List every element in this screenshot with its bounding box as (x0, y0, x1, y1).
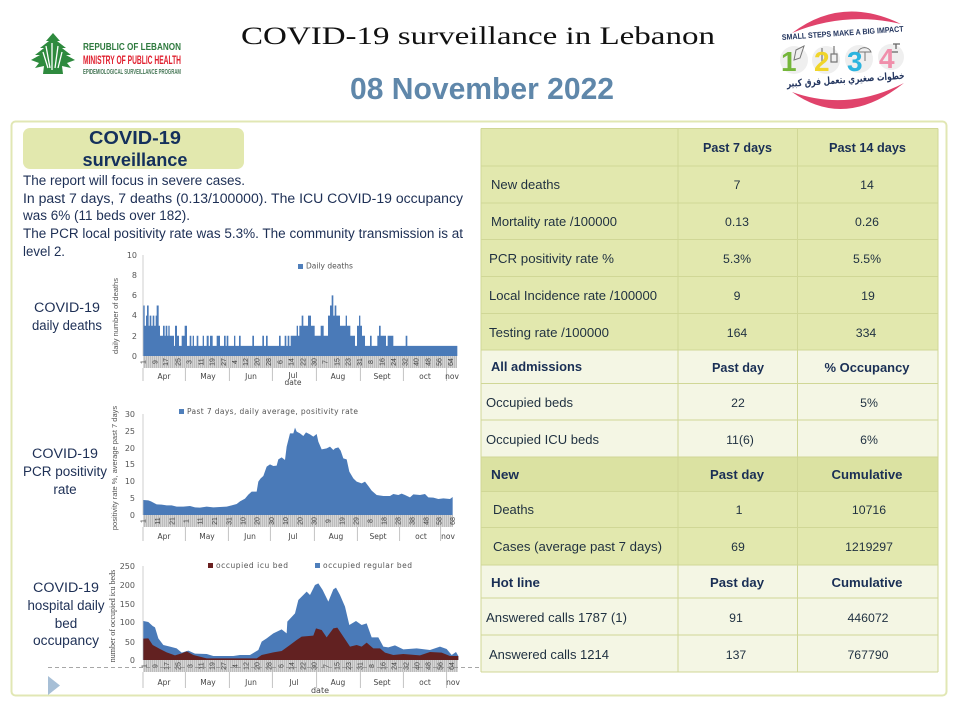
date axis: 58 (437, 517, 444, 525)
badge: small steps make a big impact: SMALL STEPS MAKE A BIG IMPACT (782, 24, 904, 42)
date axis: 48 (425, 358, 432, 366)
row: answered calls 1214: 137 (726, 648, 746, 662)
date axis: 20 (255, 517, 262, 525)
date axis (142, 660, 460, 695)
row: hot line: Past day (710, 575, 765, 590)
date axis: date (285, 378, 302, 387)
row: local incidence: Local Incidence rate /100000 (489, 288, 657, 303)
date axis: 6 (277, 360, 284, 364)
label: hospital daily bed occupancy: occupancy (33, 633, 99, 648)
y axis: 8 (132, 271, 137, 280)
row: answered calls 1214: Answered calls 1214 (489, 647, 609, 662)
date axis: May (200, 678, 216, 687)
date axis: 8 (367, 519, 374, 523)
row: PCR positivity: 5.5% (853, 252, 881, 266)
label: PCR positivity rate: COVID-19 (32, 446, 98, 461)
date axis: 14 (289, 662, 296, 670)
icon: cedar tree (31, 33, 75, 74)
y axis: 200 (120, 581, 135, 590)
text block: summary: The report will focus in severe cases. (23, 173, 245, 188)
row: all admissions: All admissions (491, 359, 582, 374)
date axis: Jun (243, 532, 256, 541)
y axis (110, 406, 143, 530)
date axis: 30 (312, 517, 319, 525)
row: deaths: 1 (736, 503, 743, 517)
row: mortality rate: 0.13 (725, 215, 749, 229)
y axis: 6 (132, 291, 137, 300)
title: COVID-19 surveillance in Lebanon (241, 23, 716, 50)
date axis: Apr (158, 678, 171, 687)
date axis: 32 (402, 358, 409, 366)
date axis: 11 (198, 517, 205, 525)
y axis: 30 (125, 410, 135, 419)
date axis: 4 (232, 360, 239, 364)
row: occupied beds: 22 (731, 396, 745, 410)
legend: occupied regular bed (323, 561, 412, 570)
date axis: Sept (373, 372, 391, 381)
text block: summary (22, 173, 463, 259)
label: PCR positivity rate: rate (53, 482, 77, 497)
text block: summary: was 6% (11 beds over 182). (22, 208, 190, 223)
label: hospital daily bed occupancy: bed (55, 616, 77, 631)
y axis: daily number of deaths (111, 278, 120, 354)
text block: summary: The PCR local positivity rate was 5.3%. The community transmission is at (23, 226, 463, 241)
row: hot line (491, 575, 902, 590)
date axis: 18 (381, 517, 388, 525)
date axis: 8 (369, 664, 376, 668)
row: local incidence (489, 288, 875, 303)
date axis: Jul (287, 532, 298, 541)
date axis: Sept (369, 532, 387, 541)
date axis: Jun (244, 372, 257, 381)
date axis: 10 (241, 517, 248, 525)
date axis: Jun (244, 678, 257, 687)
ministry name: REPUBLIC OF LEBANON (83, 41, 181, 53)
date axis: 24 (392, 662, 399, 670)
date axis: 22 (301, 662, 308, 670)
date axis: Aug (329, 532, 344, 541)
y axis: 25 (125, 427, 135, 436)
row: mortality rate: Mortality rate /100000 (491, 214, 617, 229)
row: cases: 69 (731, 540, 745, 554)
row: PCR positivity: 5.3% (723, 252, 751, 266)
ministry name (83, 41, 181, 76)
heading: COVID-19 surveillance: COVID-19 (89, 128, 181, 148)
row: new deaths: New deaths (491, 177, 560, 192)
heading: COVID-19 surveillance (23, 128, 244, 170)
row: cases: 1219297 (845, 540, 893, 554)
y axis: 20 (125, 444, 135, 453)
date axis: nov (446, 678, 460, 687)
row: new: Cumulative (832, 467, 902, 482)
row: occupied beds: Occupied beds (486, 395, 573, 410)
date axis: 17 (164, 662, 171, 670)
y axis: 10 (127, 251, 137, 260)
date axis: Aug (331, 372, 346, 381)
date axis: Apr (158, 372, 171, 381)
date axis: oct (415, 532, 427, 541)
date axis: 64 (449, 662, 456, 670)
date axis: 19 (210, 662, 217, 670)
row: deaths (493, 502, 886, 517)
date axis: 28 (266, 358, 273, 366)
date axis: 22 (300, 358, 307, 366)
date axis: 7 (323, 664, 330, 668)
badge: small steps make a big impact (780, 11, 905, 109)
date axis: nov (441, 532, 455, 541)
date axis: oct (419, 678, 431, 687)
row: cases: Cases (average past 7 days) (493, 539, 662, 554)
y axis: 2 (132, 332, 137, 341)
row: mortality rate: 0.26 (855, 215, 879, 229)
row: occupied ICU beds: Occupied ICU beds (486, 432, 599, 447)
date axis: 23 (345, 358, 352, 366)
date axis: 1 (140, 360, 148, 364)
date axis: oct (419, 372, 431, 381)
date axis: 25 (176, 358, 183, 366)
y axis: 0 (130, 656, 135, 665)
date axis: 19 (340, 517, 347, 525)
chart: hospital bed occupancy (108, 561, 460, 695)
label: daily deaths: daily deaths (32, 318, 102, 333)
date axis: 27 (221, 358, 228, 366)
y axis: 100 (120, 618, 135, 627)
date axis: Jul (287, 371, 298, 380)
date axis: 28 (396, 517, 403, 525)
row: answered calls 1214: 767790 (847, 648, 889, 662)
text block: summary: level 2. (23, 244, 65, 259)
date axis: 38 (409, 517, 416, 525)
header row (703, 140, 906, 155)
date axis: 31 (357, 358, 364, 366)
row: occupied beds: 5% (860, 396, 878, 410)
label: daily deaths (32, 300, 102, 333)
row: testing rate: Testing rate /100000 (489, 325, 609, 340)
date axis: 8 (368, 360, 375, 364)
date axis: May (200, 372, 216, 381)
row: all admissions: Past day (712, 360, 765, 375)
area (143, 428, 453, 515)
row: testing rate (489, 325, 876, 340)
badge: small steps make a big impact: خطوات صغيري بتعمل فرق كبير (786, 71, 905, 90)
y axis: positivity rate %, average past 7 days (110, 406, 119, 530)
date axis: Aug (331, 678, 346, 687)
date axis: 64 (448, 358, 455, 366)
date axis: May (199, 532, 215, 541)
row: PCR positivity (489, 251, 881, 266)
label: PCR positivity rate: PCR positivity (23, 464, 107, 479)
bars (143, 295, 457, 356)
date axis: 3 (186, 360, 193, 364)
row: new: Past day (710, 467, 765, 482)
row: hot line: Hot line (491, 575, 540, 590)
label: daily deaths: COVID-19 (34, 300, 100, 315)
legend (208, 561, 412, 570)
label: hospital daily bed occupancy: COVID-19 (33, 580, 99, 595)
row: occupied ICU beds (486, 432, 878, 447)
y axis: 0 (132, 352, 137, 361)
date axis: 15 (335, 662, 342, 670)
date axis: 16 (381, 662, 388, 670)
date axis: 9 (326, 519, 333, 523)
badge: small steps make a big impact: 1 (781, 46, 797, 77)
date axis: 30 (269, 517, 276, 525)
date axis: 1 (140, 519, 148, 523)
label: hospital daily bed occupancy: hospital daily (28, 598, 105, 613)
row: new deaths: 14 (860, 178, 874, 192)
date axis: 21 (212, 517, 219, 525)
y axis (111, 251, 143, 361)
date axis: 17 (163, 358, 170, 366)
row: all admissions (491, 359, 910, 375)
badge: small steps make a big impact: 4 (879, 43, 895, 74)
date axis (140, 356, 459, 387)
date axis: 20 (297, 517, 304, 525)
row: answered calls 1787: Answered calls 1787 (1) (486, 610, 627, 625)
date axis: 48 (423, 517, 430, 525)
y axis: 15 (125, 460, 135, 469)
badge: small steps make a big impact: 2 (814, 46, 830, 77)
row: cases (493, 539, 893, 554)
y axis: 250 (120, 562, 135, 571)
row: new: New (491, 467, 520, 482)
row: testing rate: 334 (856, 326, 876, 340)
row: all admissions: % Occupancy (824, 360, 910, 375)
stacked area (143, 583, 458, 660)
date axis: 25 (176, 662, 183, 670)
row: occupied beds (486, 395, 878, 410)
row: occupied ICU beds: 6% (860, 433, 878, 447)
y axis: 0 (130, 511, 135, 520)
date axis: 14 (289, 358, 296, 366)
date axis: 21 (169, 517, 176, 525)
date axis: 31 (357, 662, 364, 670)
date axis: 3 (187, 664, 194, 668)
row: hot line: Cumulative (832, 575, 902, 590)
date axis: 29 (354, 517, 361, 525)
date axis: 10 (283, 517, 290, 525)
legend: occupied icu bed (216, 561, 288, 570)
table: surveillance indicators (481, 128, 938, 672)
date axis: 9 (153, 360, 160, 364)
row: new deaths (491, 177, 874, 192)
date axis: Sept (373, 678, 391, 687)
date axis: 20 (255, 358, 262, 366)
date axis: 11 (198, 662, 205, 670)
row: answered calls 1214 (489, 647, 889, 662)
date axis: 68 (450, 517, 457, 525)
row: occupied ICU beds: 11(6) (726, 433, 754, 447)
text block: summary: In past 7 days, 7 deaths (0.13/100000). The ICU COVID-19 occupancy (23, 191, 463, 206)
date axis: 4 (232, 664, 239, 668)
date axis: 48 (426, 662, 433, 670)
y axis: 150 (120, 600, 135, 609)
date axis: 20 (255, 662, 262, 670)
date axis: 12 (243, 358, 250, 366)
date heading: 08 November 2022 (350, 71, 614, 106)
icon: navigation arrow (48, 676, 60, 695)
date axis: Apr (158, 532, 171, 541)
date axis: 12 (243, 662, 250, 670)
chart: PCR positivity rate (110, 406, 457, 541)
row: testing rate: 164 (727, 326, 747, 340)
header row: Past 7 days (703, 140, 772, 155)
row: mortality rate (491, 214, 879, 229)
date axis: date (311, 686, 329, 695)
row: deaths: Deaths (493, 502, 534, 517)
row backgrounds (481, 128, 938, 672)
date axis: 28 (266, 662, 273, 670)
label: PCR positivity rate (23, 446, 107, 497)
legend: Daily deaths (306, 262, 353, 270)
y axis: 50 (125, 638, 135, 647)
chart: daily deaths (111, 251, 459, 387)
date axis: 11 (155, 517, 162, 525)
row: new deaths: 7 (734, 178, 741, 192)
date axis: Jul (288, 678, 299, 687)
ministry name: EPIDEMIOLOGICAL SURVEILLANCE PROGRAM (83, 67, 181, 76)
date axis: nov (445, 372, 459, 381)
date axis: 31 (226, 517, 233, 525)
row: answered calls 1787: 91 (729, 611, 743, 625)
date axis: 16 (380, 358, 387, 366)
date axis: 56 (437, 662, 444, 670)
date axis: 19 (210, 358, 217, 366)
y axis: number of occupied icu beds (108, 570, 117, 662)
y axis (108, 562, 143, 665)
row: local incidence: 9 (734, 289, 741, 303)
heading: COVID-19 surveillance: surveillance (82, 150, 188, 170)
legend: Past 7 days, daily average, positivity rate (187, 407, 358, 416)
date axis: 6 (278, 664, 285, 668)
date axis: 56 (437, 358, 444, 366)
date axis: 24 (391, 358, 398, 366)
date axis: 1 (142, 664, 148, 668)
date axis: 15 (334, 358, 341, 366)
ministry name: MINISTRY OF PUBLIC HEALTH (83, 55, 181, 67)
badge: small steps make a big impact: 3 (847, 46, 863, 77)
row: new (491, 467, 902, 482)
date axis: 1 (184, 519, 190, 523)
header row: Past 14 days (829, 140, 906, 155)
date axis: 9 (152, 664, 159, 668)
row: local incidence: 19 (861, 289, 875, 303)
panel: main frame (12, 122, 946, 696)
row: PCR positivity: PCR positivity rate % (489, 251, 614, 266)
date axis: 27 (221, 662, 228, 670)
date axis: 40 (415, 662, 422, 670)
logo: Ministry of Public Health (31, 33, 181, 76)
date axis: 7 (323, 360, 330, 364)
row: answered calls 1787 (486, 610, 889, 625)
y axis: 4 (132, 311, 137, 320)
row: deaths: 10716 (852, 503, 886, 517)
date axis: 30 (312, 358, 319, 366)
date axis: 23 (346, 662, 353, 670)
date axis: 11 (199, 358, 206, 366)
y axis: 5 (130, 494, 135, 503)
date axis: 32 (403, 662, 410, 670)
date axis (140, 515, 457, 541)
date axis: 40 (414, 358, 421, 366)
label: hospital daily bed occupancy (28, 580, 105, 648)
y axis: 10 (125, 477, 135, 486)
date axis: 30 (312, 662, 319, 670)
row: answered calls 1787: 446072 (847, 611, 889, 625)
